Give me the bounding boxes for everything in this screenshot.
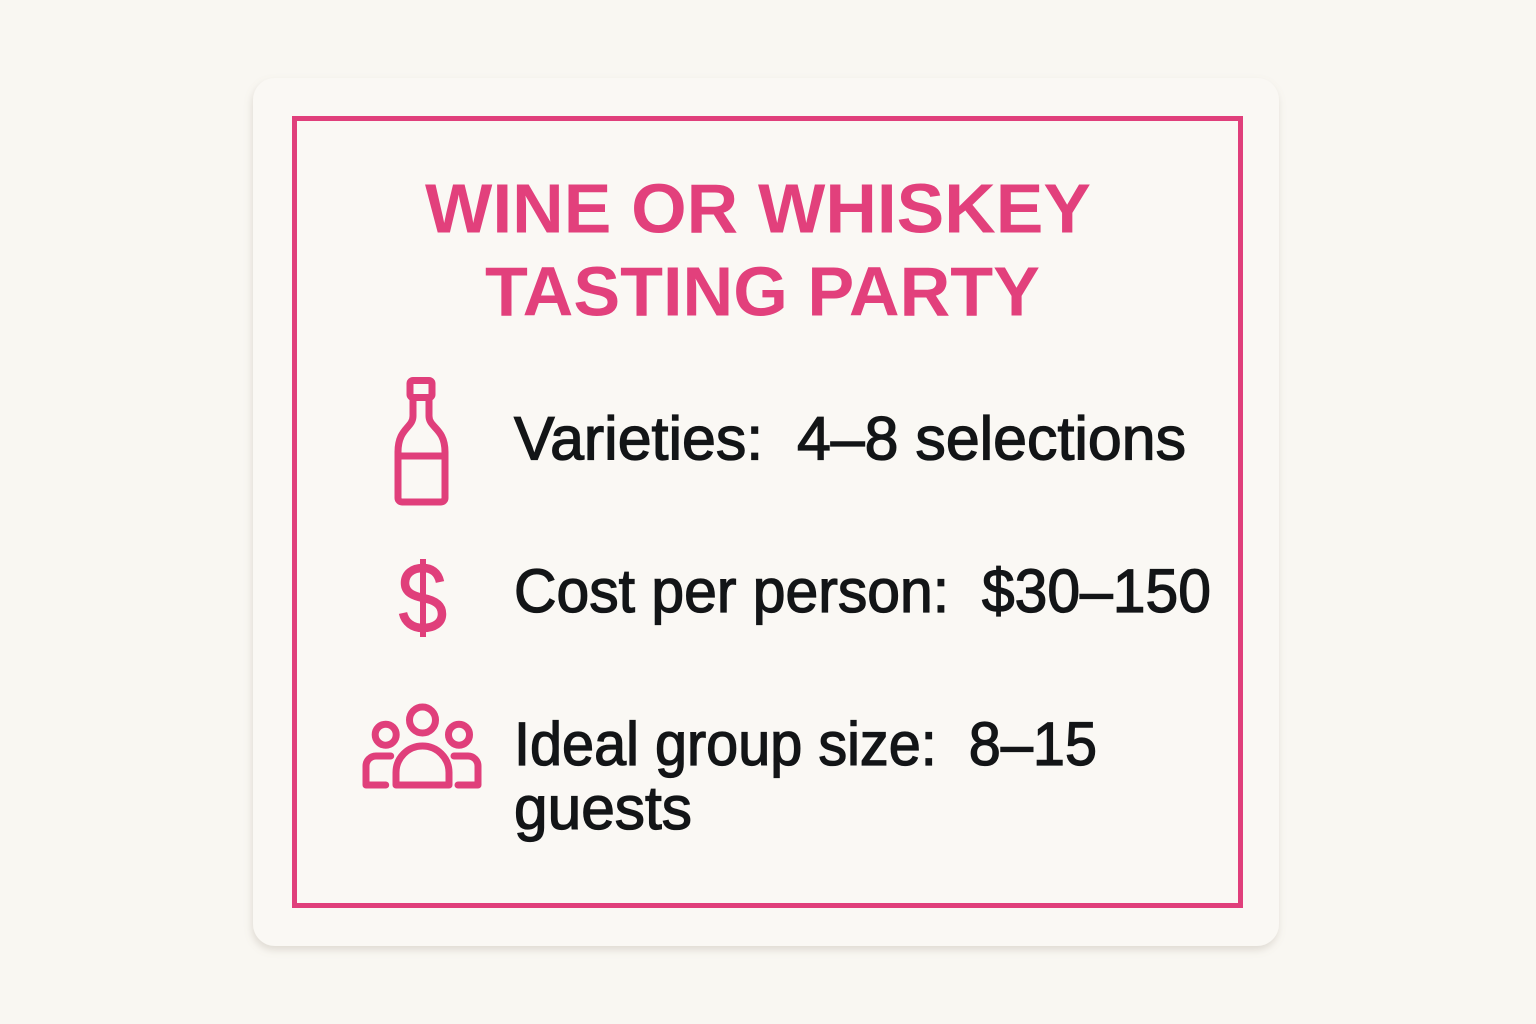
text: varieties: Varieties: 4–8 selections: [514, 404, 1186, 472]
icon: wine bottle: [398, 380, 445, 502]
icon: group of people: [366, 707, 478, 785]
title: WINE OR WHISKEY: [425, 170, 1091, 248]
icon: dollar sign: [403, 559, 442, 637]
title: [425, 170, 1091, 330]
title: TASTING PARTY: [485, 252, 1040, 330]
text: ideal group size: [514, 710, 1097, 842]
text: cost per person: Cost per person: $30–150: [514, 557, 1211, 625]
text: ideal group size: Ideal group size: 8–15: [514, 710, 1097, 778]
panel: card: [253, 78, 1279, 946]
text: ideal group size: guests: [514, 774, 692, 842]
pink frame: [294, 118, 1240, 906]
